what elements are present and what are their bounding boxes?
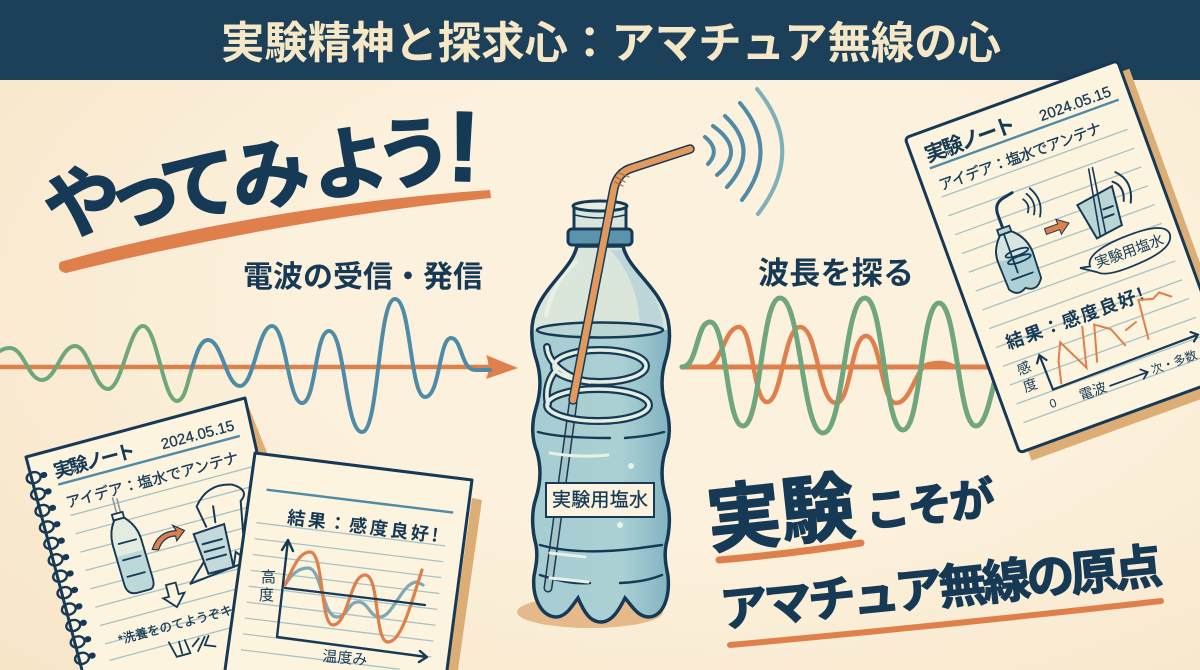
label: exploring wavelength: 波長を探る — [758, 256, 914, 291]
closing message line 1 — [703, 450, 998, 563]
ruled lines — [941, 129, 1200, 423]
idea text: アイデア：塩水でアンテナ — [936, 117, 1105, 195]
sheet backing — [448, 498, 482, 670]
result text: 結果：感度良好! — [286, 504, 440, 548]
highlights — [546, 262, 634, 582]
chart axis labels: 度 — [1021, 375, 1039, 395]
bottle glass — [532, 246, 669, 622]
cap ring — [568, 229, 632, 245]
underline: line 2 — [730, 601, 1161, 645]
ruled lines — [71, 465, 297, 660]
speech bubble — [1075, 222, 1176, 283]
closing message line 2 — [718, 540, 1165, 645]
sketch: bottle with coil — [977, 185, 1067, 297]
bottle ribs — [538, 432, 664, 583]
bottle outline — [532, 246, 669, 622]
chart axes and line — [1029, 285, 1200, 411]
text: experiment: こそが — [863, 473, 997, 537]
text: experiment: 実験 — [703, 465, 859, 563]
text: origin of amateur radio: アマチュア無線の原点 — [718, 540, 1165, 638]
note: bottom result sheet — [225, 453, 482, 670]
chart axis labels: 次・多数 — [1149, 347, 1199, 377]
heading: let's try: ! — [446, 91, 482, 203]
text: experiment — [703, 450, 998, 563]
spiral binding — [25, 470, 94, 665]
result text: 結果：感度良好! — [1002, 281, 1148, 355]
handwritten note: *洗養をのてようぞキ — [117, 602, 234, 647]
title: 実験精神と探求心：アマチュア無線の心 — [221, 7, 1001, 71]
underline: let's try — [59, 190, 491, 273]
x axis label: 温度み — [322, 648, 368, 669]
note date: 2024.05.15 — [1037, 83, 1113, 125]
chart axis labels: 感 — [1015, 358, 1033, 378]
signal arcs — [705, 89, 782, 214]
y axis label: 度 — [259, 587, 274, 604]
ruled lines — [241, 523, 445, 670]
sketch: bottle — [101, 493, 155, 596]
line chart — [277, 540, 427, 662]
straw — [573, 149, 690, 400]
note title: 実験ノート — [51, 440, 138, 483]
heading: let's try: やってみよう — [38, 105, 459, 253]
chart axis labels — [1015, 304, 1199, 420]
header band — [0, 0, 1200, 80]
shadow under bottle — [517, 596, 663, 628]
inner straw lower part — [548, 403, 573, 588]
idea text: アイデア：塩水でアンテナ — [63, 446, 241, 513]
right wave — [682, 298, 1000, 433]
left wave with arrow — [0, 299, 518, 432]
chart axis labels: 0 — [1047, 396, 1059, 411]
note title: 実験ノート — [922, 113, 1019, 167]
water — [534, 330, 668, 620]
coil — [547, 347, 649, 421]
chart axis labels: 電波 — [1077, 379, 1109, 403]
sketch: beaker — [1067, 158, 1142, 241]
note backing — [248, 405, 268, 470]
note: bottom left — [24, 398, 305, 670]
sketch arrow — [148, 523, 188, 551]
speech bubble: 実験用塩水 — [1093, 231, 1167, 272]
label: experiment saline — [546, 483, 654, 517]
note sheet — [905, 61, 1200, 453]
note date: 2024.05.15 — [159, 417, 236, 453]
sketch: beaker and hand — [168, 480, 263, 584]
water surface — [537, 322, 663, 338]
label: experiment saline: 実験用塩水 — [552, 489, 648, 511]
neck — [574, 206, 626, 230]
sketch arrow — [1043, 216, 1072, 239]
glass shading — [610, 250, 664, 330]
scribble — [169, 631, 215, 658]
underline: line 1 — [719, 543, 861, 560]
label: radio reception and transmission: 電波の受信・発信 — [243, 261, 483, 294]
y axis label — [259, 569, 276, 604]
sheet — [225, 453, 472, 670]
bottle with straw and coil — [517, 149, 690, 628]
note backing — [917, 69, 1200, 461]
down arrow — [160, 581, 188, 610]
note: top right — [905, 61, 1200, 461]
note sheet — [26, 398, 305, 670]
y axis label: 高 — [261, 569, 276, 586]
